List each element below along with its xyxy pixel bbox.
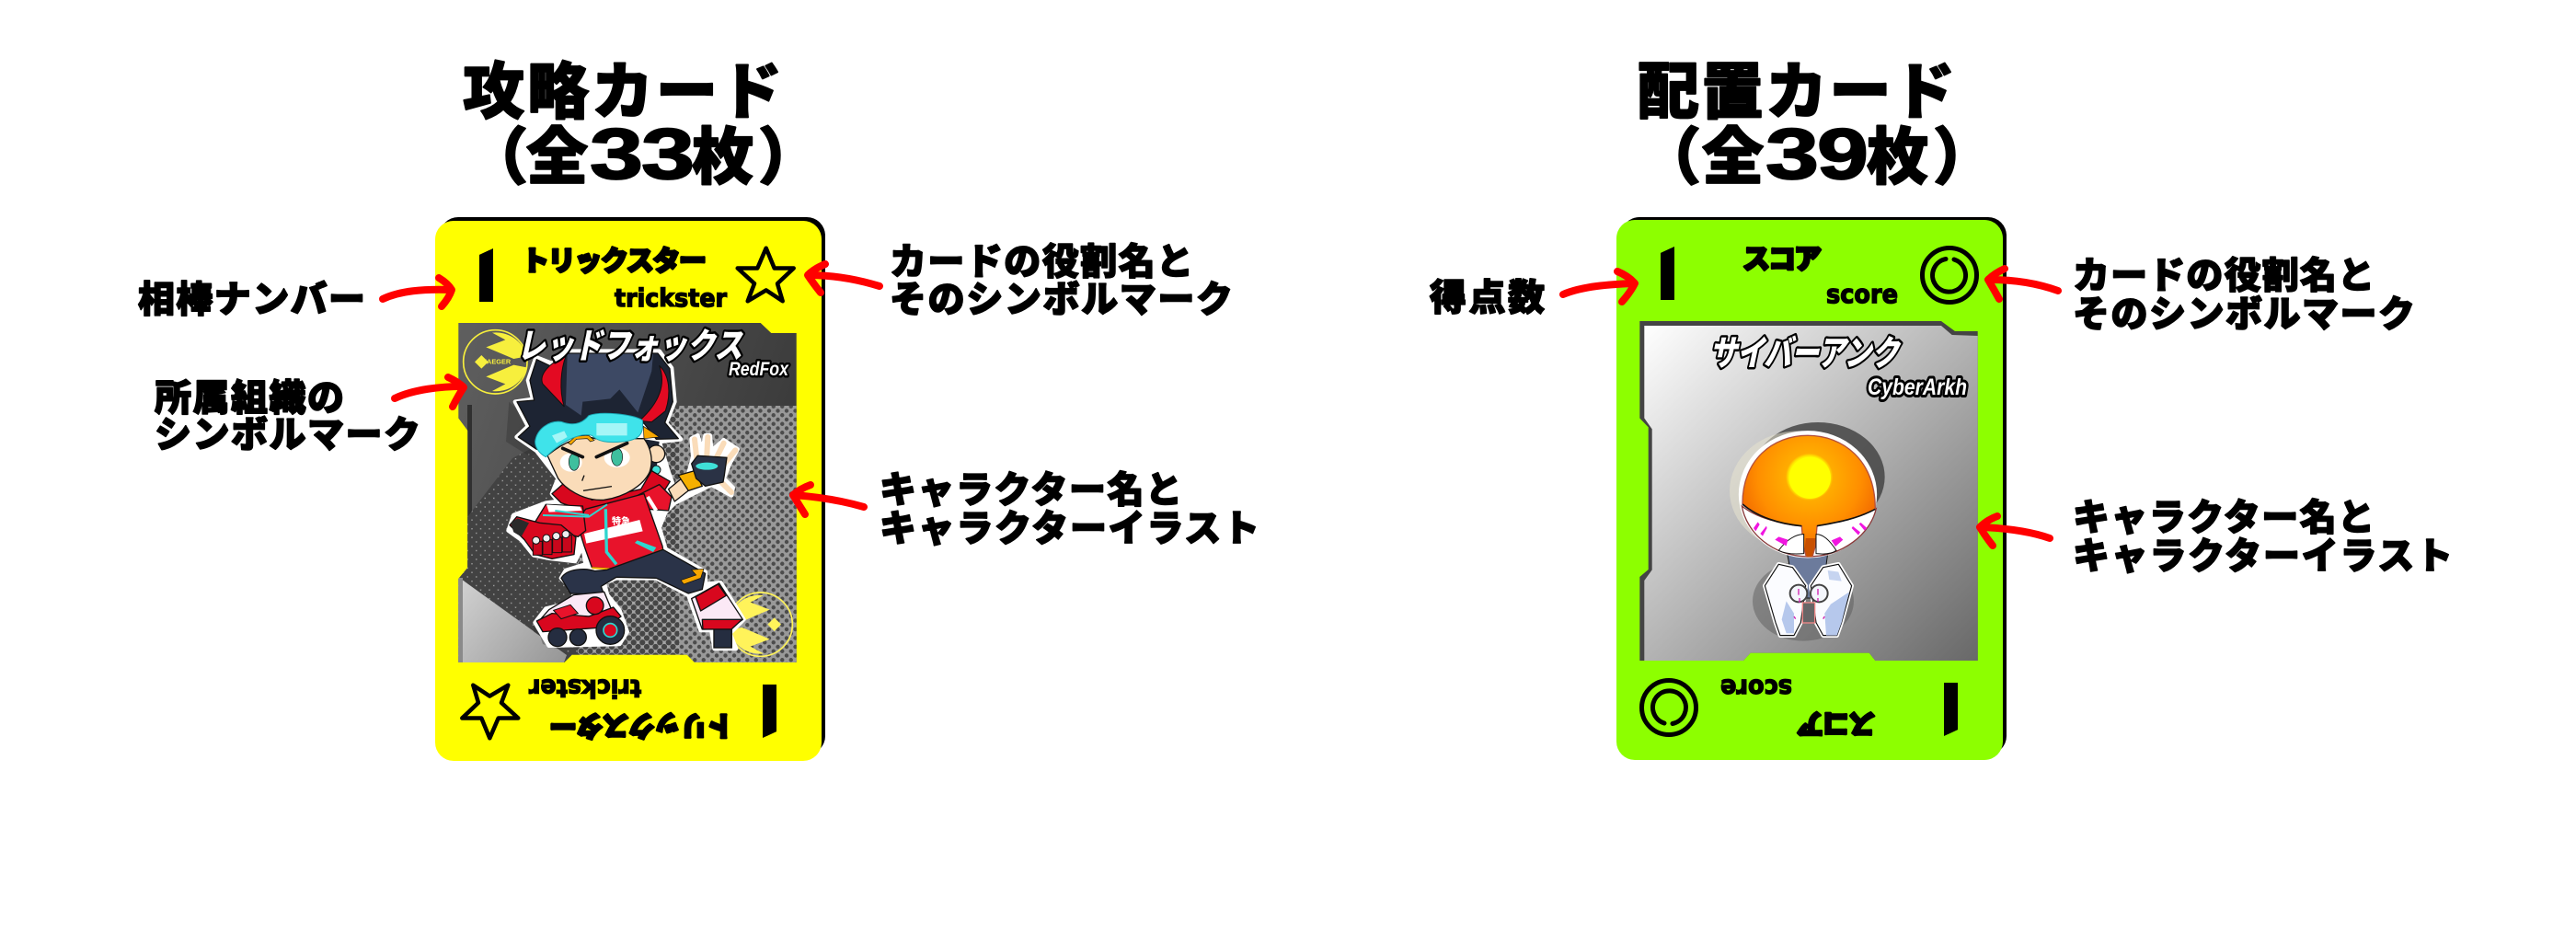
soft drop shadow xyxy=(506,402,561,650)
arrow: role name left card xyxy=(808,264,880,293)
title: attack cards: 全 xyxy=(526,123,588,192)
rotated footer of card: 1 xyxy=(1930,662,1982,766)
body shadow xyxy=(1753,561,1854,641)
right body xyxy=(1811,564,1852,636)
arrow: role name right card xyxy=(1988,269,2058,299)
head light shadow xyxy=(1730,431,1868,550)
mech glove xyxy=(510,517,576,558)
fingers xyxy=(695,437,735,492)
wrist band xyxy=(678,471,702,490)
cheek plates xyxy=(1778,535,1836,554)
hood xyxy=(552,471,670,512)
small wheel 2 xyxy=(569,629,586,646)
left skate hub xyxy=(586,597,604,615)
label: character name, right card: キャラクター名と xyxy=(2073,498,2375,538)
label: card role name, right card: カードの役割名と xyxy=(2073,256,2375,296)
hair strands xyxy=(542,356,566,407)
label: score points: 得点数 xyxy=(1430,278,1545,318)
right iris xyxy=(612,448,623,466)
knuckles xyxy=(533,535,571,555)
jacket hem xyxy=(592,549,663,570)
label: organisation symbol xyxy=(155,378,420,455)
title: attack cards xyxy=(463,58,820,194)
ring marks xyxy=(1794,589,1824,619)
label: card role name, right card xyxy=(2073,256,2415,335)
arrow: score points xyxy=(1563,271,1635,302)
right skate wheel xyxy=(714,626,731,648)
right body shade xyxy=(1824,592,1849,636)
rotated footer of card: トリックスター xyxy=(549,709,734,740)
jacket zip xyxy=(605,509,616,564)
mouth xyxy=(582,476,612,490)
jacket pocket xyxy=(635,540,656,552)
card number, top: 1 xyxy=(1637,217,1688,320)
label: organisation symbol: シンボルマーク xyxy=(155,415,420,455)
rotated footer of card xyxy=(1639,678,1958,737)
character name english: CyberArkh xyxy=(1868,374,1967,400)
dome xyxy=(1742,435,1875,557)
right eye xyxy=(604,448,630,467)
glove block xyxy=(511,518,529,536)
glove light xyxy=(696,463,718,470)
title: placement cards: （ xyxy=(1639,123,1701,192)
goggles glare xyxy=(552,423,627,443)
arrow: character name left card xyxy=(793,485,864,514)
label: character name, right card xyxy=(2073,498,2453,577)
small wheels xyxy=(548,628,567,647)
label: card role name, left card xyxy=(890,242,1233,320)
character name: レッドフォックス xyxy=(515,327,749,366)
character name english: RedFox xyxy=(729,359,789,380)
rotated footer of card: trickster xyxy=(528,673,641,702)
title: placement cards: 配置カード xyxy=(1638,58,1955,127)
label: character name, left card: キャラクターイラスト xyxy=(880,509,1259,549)
title: attack cards: ） xyxy=(758,123,820,192)
icon: organisation emblem, lower right xyxy=(729,593,792,656)
title: attack cards: 枚 xyxy=(692,123,753,192)
earring xyxy=(652,466,661,474)
sleeve stripes xyxy=(641,497,656,512)
rotated footer of card: スコア xyxy=(1797,708,1876,738)
laces xyxy=(543,504,607,517)
sleeve white xyxy=(546,504,582,512)
left body shade xyxy=(1782,601,1794,633)
hair xyxy=(517,353,678,449)
icon: star, top xyxy=(738,248,794,301)
panel: artwork background xyxy=(1644,326,1978,661)
hair strand right xyxy=(639,365,669,422)
label: partner number: 相棒ナンバー xyxy=(138,280,365,320)
title: placement cards: 枚 xyxy=(1867,123,1928,192)
left eye xyxy=(560,454,582,472)
face xyxy=(547,437,651,500)
panel: artwork frame xyxy=(1639,321,1978,661)
ear and side hair xyxy=(641,439,660,478)
title: attack cards: 攻略カード xyxy=(463,58,782,127)
role name, top: トリックスター xyxy=(522,247,707,277)
label: card role name, right card: そのシンボルマーク xyxy=(2073,294,2415,335)
panel: green placement card xyxy=(1616,217,2007,766)
left body xyxy=(1765,564,1806,636)
legs xyxy=(561,549,706,595)
label: card role name, left card: カードの役割名と xyxy=(890,242,1193,282)
arrow: partner number xyxy=(383,278,452,306)
hair highlight xyxy=(566,354,653,416)
role name english, top: trickster xyxy=(615,284,728,313)
title: placement cards xyxy=(1638,58,1995,194)
role name english, top: score xyxy=(1826,279,1898,309)
sun highlight xyxy=(1789,457,1831,499)
head base xyxy=(1740,432,1876,558)
label: character name, left card xyxy=(880,470,1259,549)
left boot xyxy=(540,592,612,619)
label: card role name, left card: そのシンボルマーク xyxy=(890,280,1233,320)
right arm sleeve xyxy=(628,485,672,511)
rings xyxy=(1790,585,1828,602)
label: character name, right card: キャラクターイラスト xyxy=(2073,536,2453,577)
left sleeve xyxy=(534,504,586,536)
title: attack cards: 3 xyxy=(590,113,643,194)
title: placement cards: 全 xyxy=(1702,123,1764,192)
right boot straps xyxy=(696,584,726,611)
wheel centre xyxy=(604,624,617,637)
goggles xyxy=(535,413,643,457)
card number, top: 1 xyxy=(455,219,507,322)
title: placement cards: 3 xyxy=(1765,113,1819,194)
character illustration: RedFox xyxy=(506,351,743,650)
jacket stripe xyxy=(584,520,643,544)
rotated footer of card xyxy=(460,679,776,742)
right boot xyxy=(692,583,742,629)
left skate straps xyxy=(554,604,578,619)
title: attack cards: 3 xyxy=(641,113,695,194)
head shadow xyxy=(1751,422,1885,532)
right boot sole xyxy=(702,619,742,629)
glove xyxy=(692,455,727,486)
ear xyxy=(648,445,665,463)
right body ink xyxy=(1811,564,1852,636)
label: organisation symbol: 所属組織の xyxy=(155,378,344,419)
panel: character artwork background xyxy=(458,323,797,662)
jacket label: 特急 xyxy=(612,515,630,527)
title: placement cards: ） xyxy=(1933,123,1995,192)
rotated footer of card: 1 xyxy=(749,664,800,767)
knuckle caps xyxy=(533,531,569,544)
left body ink xyxy=(1765,564,1806,636)
title: attack cards: （ xyxy=(466,123,528,192)
label: character name, left card: キャラクター名と xyxy=(880,470,1182,511)
role name, top: スコア xyxy=(1742,245,1822,275)
stem xyxy=(1805,538,1815,557)
icon: ring symbol, top xyxy=(1923,248,1976,302)
arrow: organisation symbol xyxy=(395,377,464,407)
shoulder shade xyxy=(1828,570,1842,581)
dome lower edge xyxy=(1742,504,1875,526)
icon: organisation emblem, upper left: JAEGER xyxy=(483,358,512,366)
title: placement cards: 9 xyxy=(1817,113,1869,194)
left skate frame xyxy=(536,607,621,632)
panel: yellow attack card xyxy=(435,217,825,767)
goggle strap xyxy=(568,435,594,444)
torso jacket xyxy=(577,494,663,569)
pink marks xyxy=(1754,522,1867,547)
centre box xyxy=(1802,603,1815,623)
cargo pocket xyxy=(681,569,704,584)
goggle strap right xyxy=(643,426,660,439)
icon: organisation emblem, upper left xyxy=(464,330,527,394)
rotated footer of card: score xyxy=(1720,673,1792,704)
forearm xyxy=(669,476,696,501)
brows xyxy=(563,443,627,457)
neck xyxy=(1788,554,1828,598)
left iris xyxy=(569,454,580,470)
white sticker outline xyxy=(509,351,743,649)
character illustration: CyberArkh xyxy=(1730,422,1885,641)
character name: サイバーアンク xyxy=(1708,334,1905,374)
arrow: character name right card xyxy=(1980,516,2050,546)
face white xyxy=(1742,506,1876,557)
big wheel xyxy=(596,616,625,644)
